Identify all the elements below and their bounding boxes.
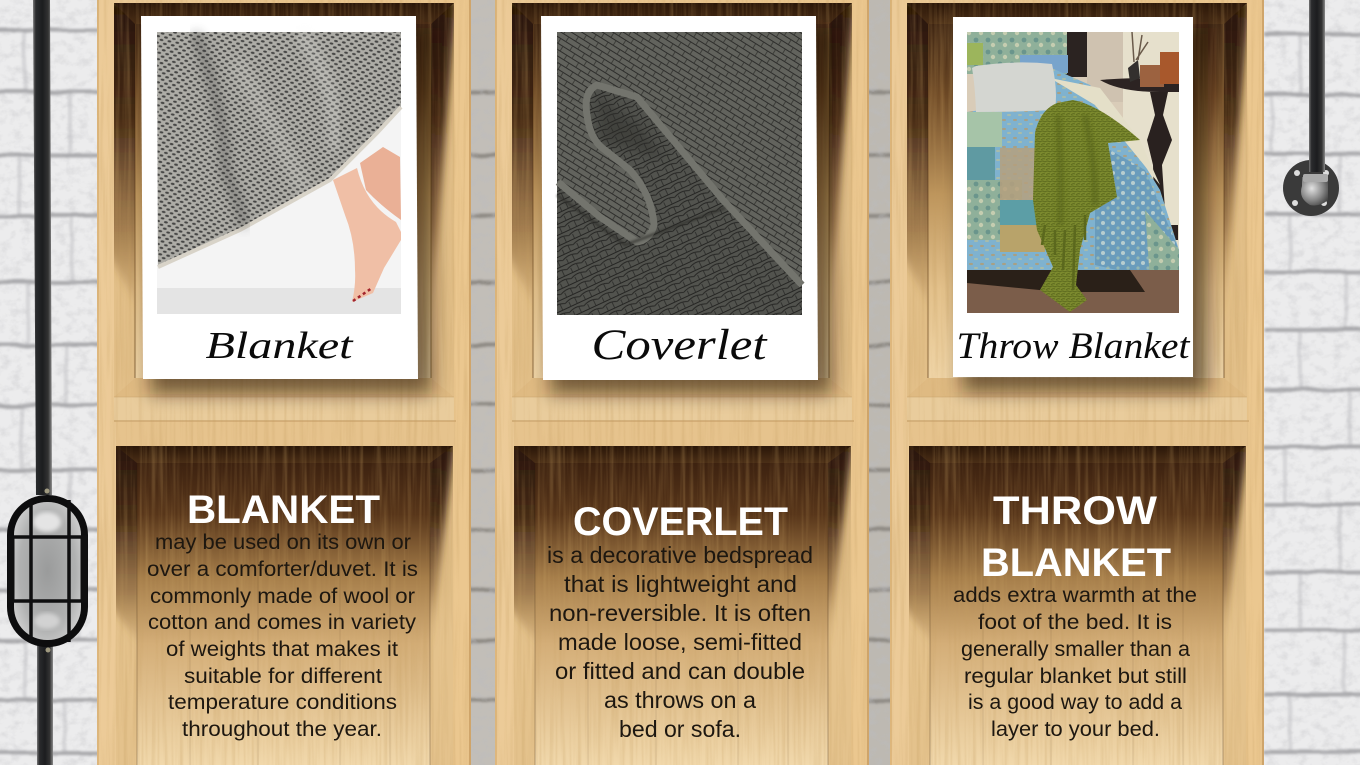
description: coverlet: non-reversible. It is often <box>549 600 811 626</box>
description: throw blanket: generally smaller than a <box>961 638 1190 661</box>
description: coverlet: is a decorative bedspread <box>547 542 813 568</box>
shelf 3 <box>883 0 1264 765</box>
description: blanket: temperature conditions <box>168 691 397 714</box>
description: throw blanket: layer to your bed. <box>991 718 1160 741</box>
caption: Throw Blanket: Throw Blanket <box>956 326 1191 367</box>
description: throw blanket: is a good way to add a <box>968 691 1182 714</box>
description: throw blanket: adds extra warmth at the <box>953 584 1197 607</box>
description: blanket: may be used on its own or <box>155 531 411 554</box>
icon: wall lamp <box>7 488 88 652</box>
caption: Coverlet: Coverlet <box>592 322 768 369</box>
description: blanket: over a comforter/duvet. It is <box>147 558 418 581</box>
polaroid: coverlet <box>541 16 832 394</box>
description: coverlet: made loose, semi-fitted <box>558 629 802 655</box>
heading: COVERLET: COVERLET <box>573 500 788 544</box>
text panel: throw blanket <box>953 489 1197 741</box>
description: blanket: cotton and comes in variety <box>148 611 417 634</box>
left wall pipe <box>33 0 53 765</box>
description: blanket: of weights that makes it <box>166 638 398 661</box>
text panel: blanket <box>147 488 418 741</box>
description: throw blanket: foot of the bed. It is <box>978 611 1172 634</box>
description: coverlet <box>547 542 813 742</box>
photo: patchwork bed with green throw <box>967 32 1179 313</box>
polaroid: throw blanket <box>953 17 1208 392</box>
caption: Blanket: Blanket <box>206 325 354 367</box>
description: coverlet: bed or sofa. <box>619 716 741 742</box>
shelf 1 <box>90 0 471 765</box>
description: coverlet: or fitted and can double <box>555 658 805 684</box>
description: blanket <box>147 531 418 741</box>
photo: grey blanket over feet <box>157 32 401 314</box>
description: blanket: commonly made of wool or <box>150 585 415 608</box>
description: throw blanket: regular blanket but still <box>964 665 1187 688</box>
shelf 2 <box>488 0 869 765</box>
polaroid: blanket <box>141 16 432 394</box>
heading: THROW BLANKET: BLANKET <box>981 541 1171 585</box>
description: coverlet: that is lightweight and <box>564 571 797 597</box>
description: throw blanket <box>953 584 1197 741</box>
description: blanket: throughout the year. <box>182 718 382 741</box>
heading: THROW BLANKET: THROW <box>993 489 1157 533</box>
photo: folded grey coverlet <box>557 32 802 315</box>
text panel: coverlet <box>547 500 813 742</box>
wall gaps between shelves <box>465 0 896 765</box>
description: blanket: suitable for different <box>184 665 382 688</box>
description: coverlet: as throws on a <box>604 687 756 713</box>
right wall pipe with flange <box>1283 0 1339 216</box>
heading: BLANKET: BLANKET <box>187 488 380 532</box>
heading: THROW BLANKET <box>981 489 1171 585</box>
